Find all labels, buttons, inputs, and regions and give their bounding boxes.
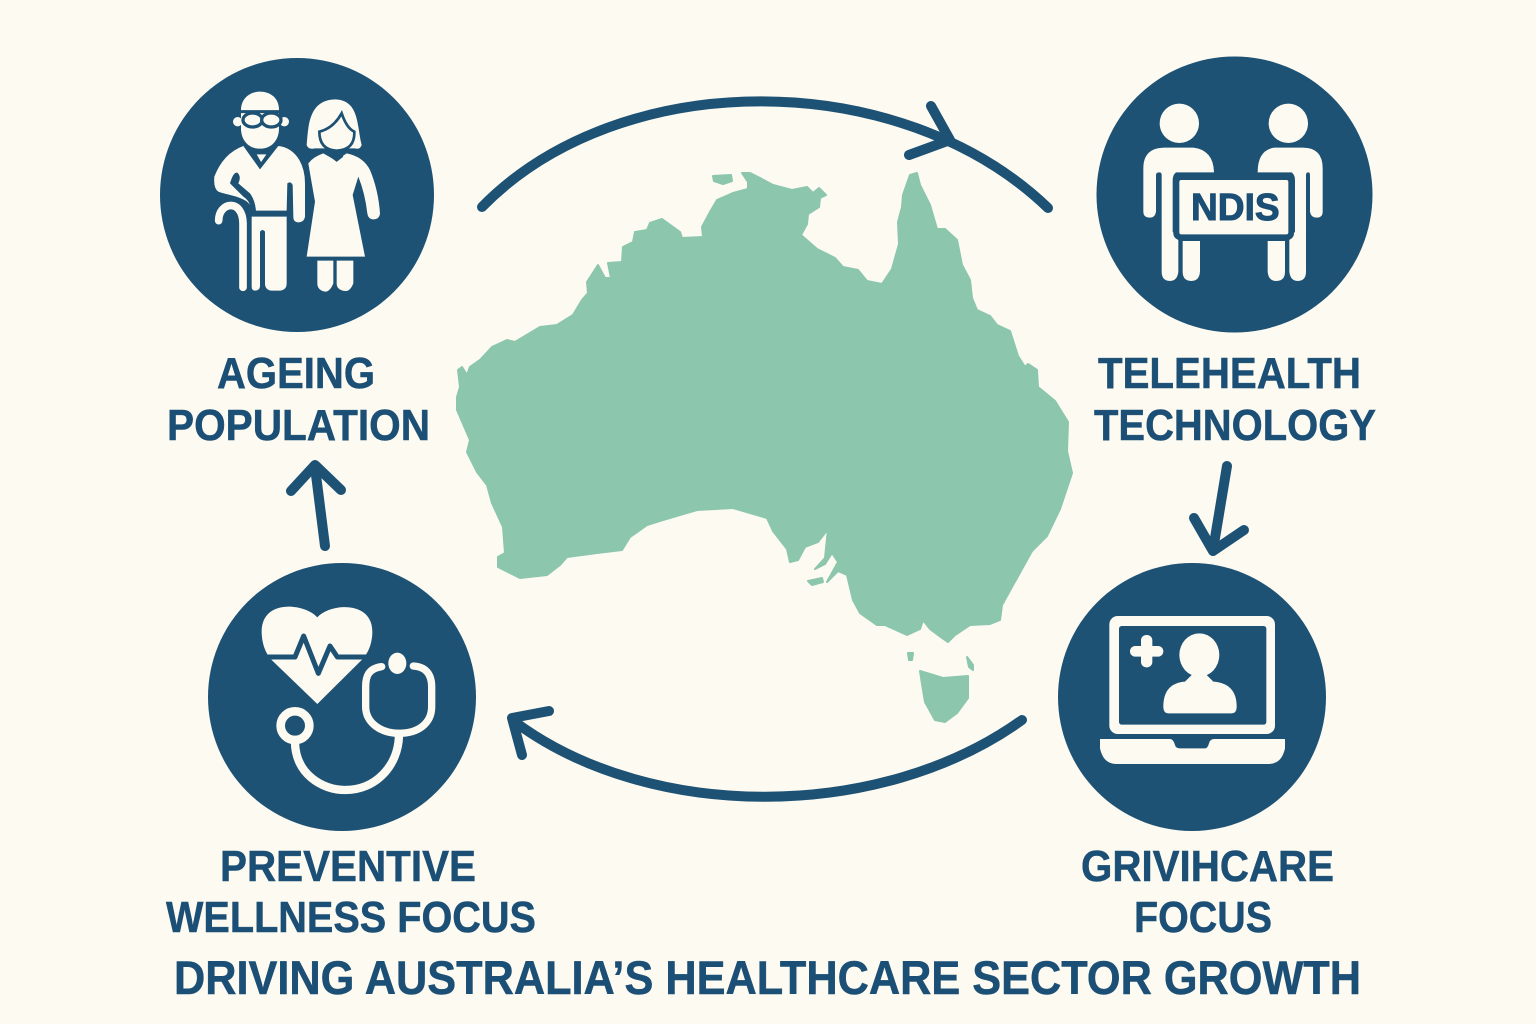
label: preventive wellness focus: WELLNESS FOCUS [166,893,536,942]
label: care focus: FOCUS [1134,893,1272,942]
icon: heart and stethoscope [208,563,476,831]
label: ageing population [167,349,430,450]
label: preventive wellness focus: PREVENTIVE [220,842,476,891]
title: DRIVING AUSTRALIA’S HEALTHCARE SECTOR GROWTH [174,951,1361,1004]
arrow: telehealth down to care [1194,466,1244,551]
label: care focus [1081,842,1334,942]
arrow: bottom arc to preventive [512,711,1022,797]
label: telehealth technology [1094,349,1376,450]
icon: older couple [160,58,434,332]
icon: two people holding NDIS sign: NDIS [1191,186,1280,229]
arrow: preventive up to ageing [291,465,341,546]
arrow: top arc to telehealth [482,101,1048,208]
label: ageing population: POPULATION [167,401,430,450]
panel: preventive wellness focus [166,563,536,942]
panel: telehealth technology [1094,56,1376,450]
icon: two people holding NDIS sign [1096,56,1372,332]
label: care focus: GRIVIHCARE [1081,842,1334,891]
label: telehealth technology: TELEHEALTH [1098,349,1361,398]
label: preventive wellness focus [166,842,536,942]
label: ageing population: AGEING [217,349,375,398]
map of Australia [457,173,1072,722]
label: telehealth technology: TECHNOLOGY [1094,401,1376,450]
icon: laptop with video consultation [1058,563,1326,831]
panel: care focus [1058,563,1334,942]
panel: ageing population [160,58,434,450]
